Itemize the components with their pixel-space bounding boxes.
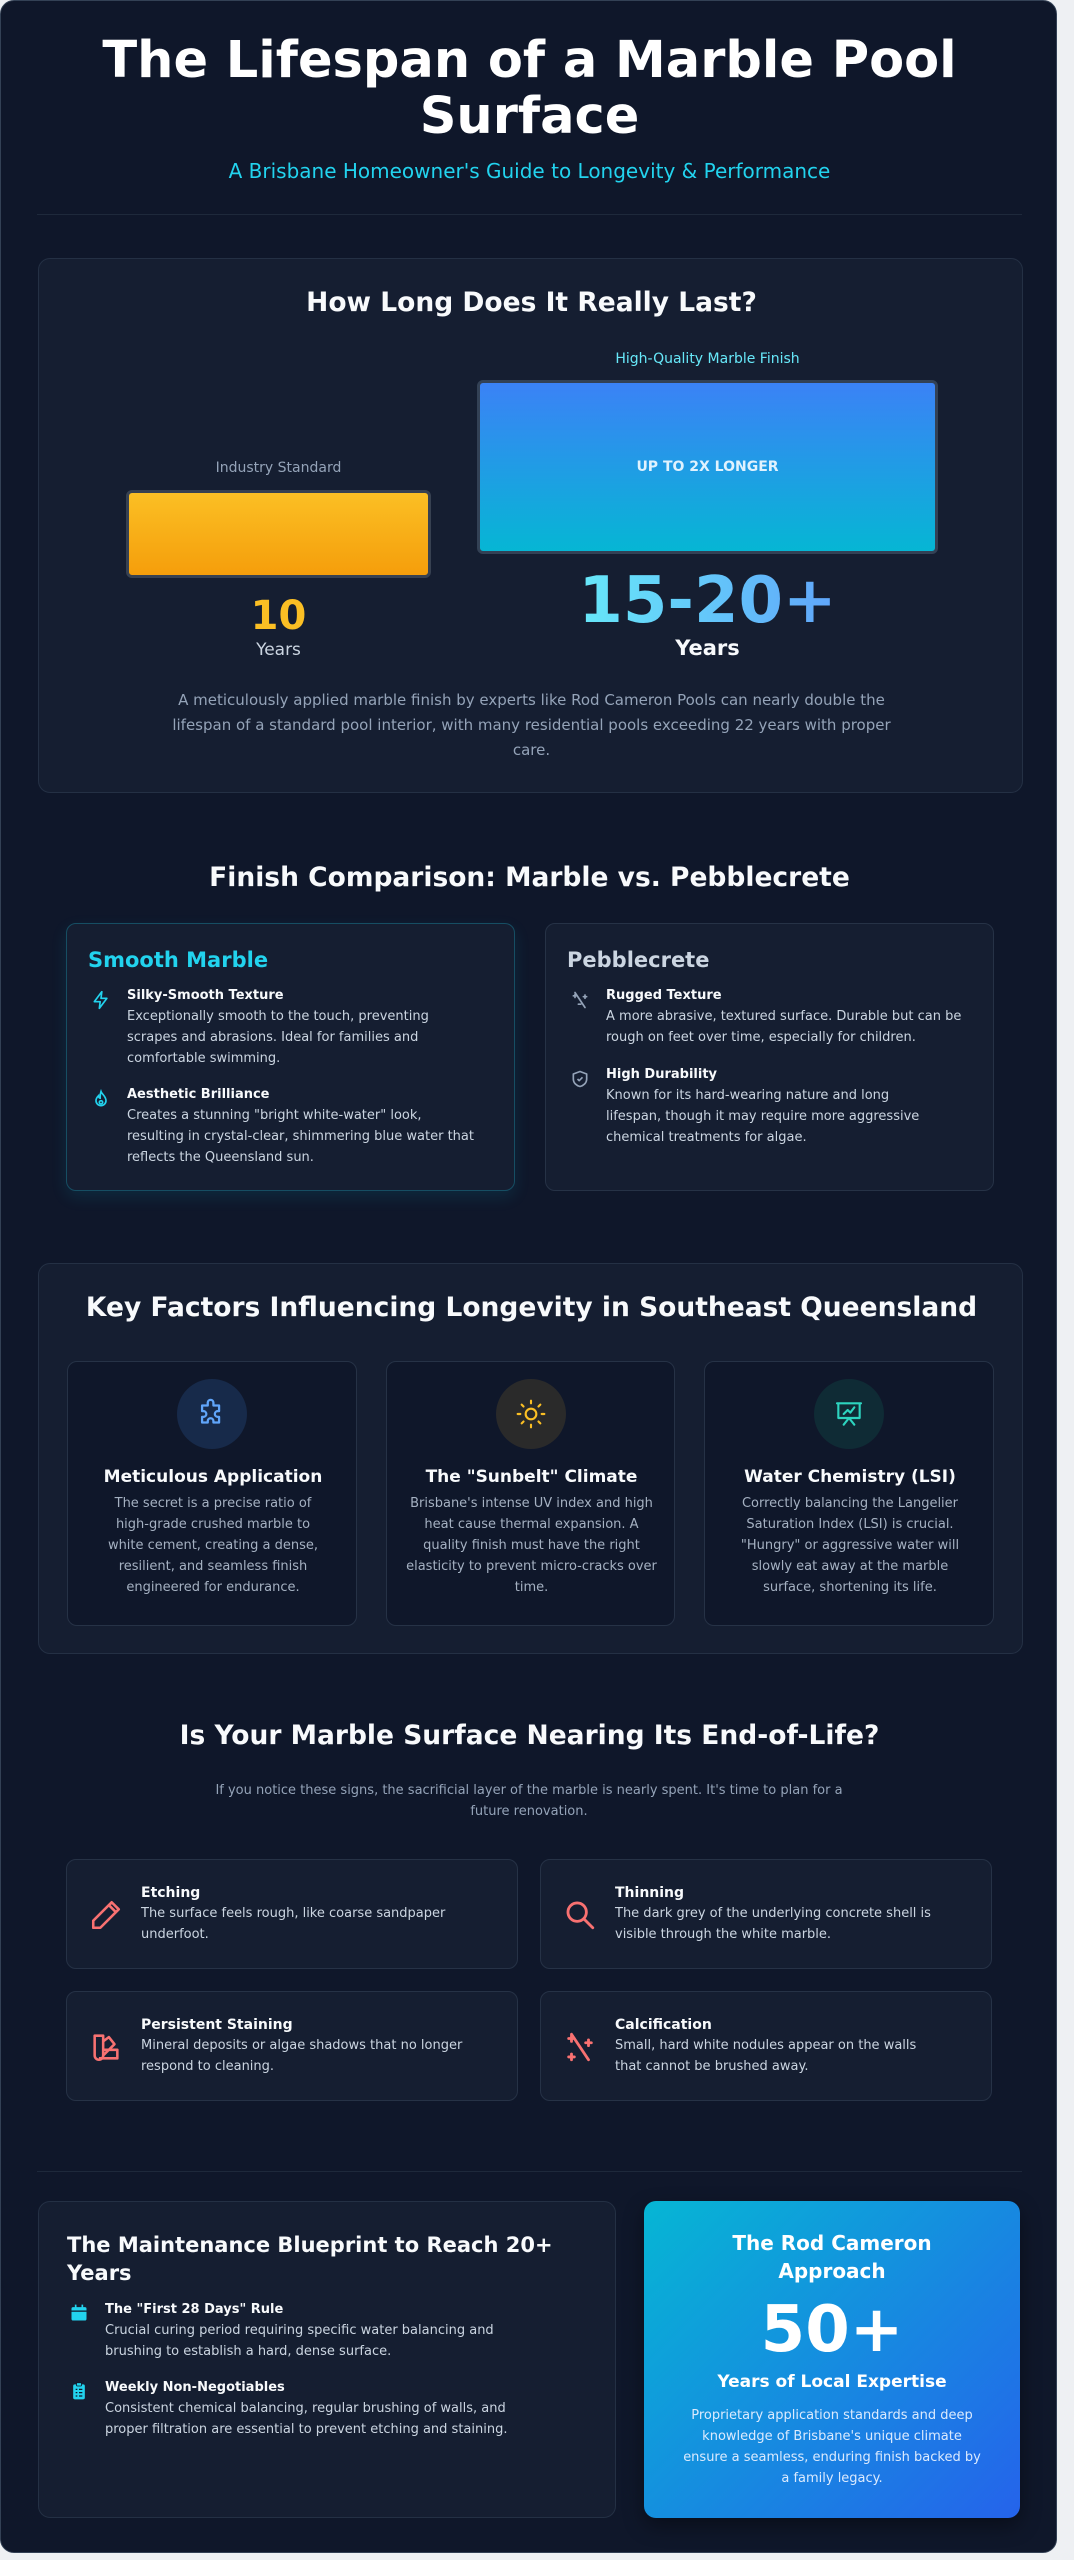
panel: lifespan comparison — [38, 258, 1023, 793]
factor: climate — [386, 1361, 675, 1626]
panel: maintenance blueprint — [38, 2201, 616, 2518]
subtitle: A Brisbane Homeowner's Guide to Longevity & Performance — [229, 159, 830, 183]
item: silky smooth — [94, 988, 429, 1066]
factor: water chemistry: Water Chemistry (LSI) — [744, 1467, 956, 1487]
panel: smooth marble: Creates a stunning "bright white-water" look, resulting in crystal-clear, shimmering blue water that reflects the Queensland sun. — [127, 1108, 474, 1165]
factor: climate: Brisbane's intense UV index and high heat cause thermal expansion. A quality finish must have the right elasticity to prevent micro-cracks over time. — [406, 1496, 657, 1595]
factor: water chemistry — [704, 1361, 994, 1626]
panel: smooth marble: Silky-Smooth Texture — [127, 988, 284, 1003]
sign: calcification: Small, hard white nodules appear on the walls that cannot be brushed away. — [615, 2038, 916, 2074]
panel: maintenance blueprint: Consistent chemical balancing, regular brushing of walls, and proper filtration are essential to prevent etching and staining. — [105, 2401, 507, 2437]
description: A meticulously applied marble finish by experts like Rod Cameron Pools can nearly double the lifespan of a standard pool interior, with many residential pools exceeding 22 years with proper care. — [172, 691, 891, 759]
title — [102, 31, 957, 146]
value: 10 years: 10 — [251, 593, 306, 639]
sign: staining: Persistent Staining — [141, 2017, 293, 2033]
sign: etching — [66, 1859, 518, 1969]
sign: thinning: The dark grey of the underlying concrete shell is visible through the white marble. — [615, 1906, 931, 1942]
heading: finish comparison: Finish Comparison: Marble vs. Pebblecrete — [209, 862, 850, 893]
sign: etching: The surface feels rough, like coarse sandpaper underfoot. — [141, 1906, 445, 1942]
factor: water chemistry: Correctly balancing the Langelier Saturation Index (LSI) is crucial. "Hungry" or aggressive water will slowly eat away at the marble surface, shortening its life. — [741, 1496, 959, 1595]
panel: pebblecrete — [545, 923, 994, 1191]
item: high durability — [572, 1067, 919, 1145]
intro text: If you notice these signs, the sacrificial layer of the marble is nearly spent. It's time to plan for a future renovation. — [215, 1783, 843, 1819]
factor: climate: The "Sunbelt" Climate — [426, 1467, 637, 1487]
sign: etching: Etching — [141, 1885, 200, 1901]
value: 15-20+ years: Years — [675, 636, 740, 660]
callout: rod cameron approach: Years of Local Expertise — [717, 2372, 947, 2392]
callout: rod cameron approach: Approach — [778, 2259, 886, 2283]
panel: pebblecrete: Pebblecrete — [567, 948, 709, 972]
panel: key factors — [38, 1263, 1023, 1654]
callout: rod cameron approach — [644, 2201, 1020, 2518]
sign: thinning — [540, 1859, 992, 1969]
item: aesthetic brilliance — [95, 1087, 474, 1165]
value: 15-20+ years: 15-20+ — [578, 564, 837, 638]
factor: application: The secret is a precise ratio of high-grade crushed marble to white cement, creating a dense, resilient, and seamless finish engineered for endurance. — [108, 1496, 318, 1595]
panel: smooth marble: Aesthetic Brilliance — [127, 1087, 270, 1102]
panel: smooth marble: Smooth Marble — [88, 948, 268, 972]
factor: application: Meticulous Application — [104, 1467, 322, 1487]
heading: How Long Does It Really Last? — [306, 287, 757, 318]
bar: industry standard — [126, 490, 431, 578]
item: first 28 days — [72, 2302, 494, 2359]
panel: smooth marble — [66, 923, 515, 1191]
value: 10 years: Years — [256, 640, 301, 660]
callout: rod cameron approach: The Rod Cameron — [732, 2231, 932, 2255]
panel: maintenance blueprint: The "First 28 Days" Rule — [105, 2302, 283, 2317]
factor: application — [67, 1361, 357, 1626]
item: weekly — [73, 2380, 507, 2437]
sign: calcification: Calcification — [615, 2017, 712, 2033]
item: rugged texture — [572, 988, 961, 1045]
heading: end of life: Is Your Marble Surface Nearing Its End-of-Life? — [180, 1720, 879, 1751]
panel: pebblecrete: Rugged Texture — [606, 988, 722, 1003]
label: marble: High-Quality Marble Finish — [615, 351, 800, 367]
title: Surface — [420, 87, 639, 146]
callout: rod cameron approach: 50+ — [761, 2293, 903, 2367]
sign: staining: Mineral deposits or algae shadows that no longer respond to cleaning. — [141, 2038, 462, 2074]
panel: maintenance blueprint: The Maintenance Blueprint to Reach 20+ Years — [67, 2233, 553, 2285]
sign: thinning: Thinning — [615, 1885, 684, 1901]
label: industry standard: Industry Standard — [216, 460, 341, 476]
panel: maintenance blueprint: Weekly Non-Negotiables — [105, 2380, 285, 2395]
sign: staining — [66, 1991, 518, 2101]
panel: pebblecrete: A more abrasive, textured surface. Durable but can be rough on feet over time, especially for children. — [606, 1009, 961, 1045]
title: The Lifespan of a Marble Pool — [102, 31, 957, 90]
value: 10 years — [251, 593, 306, 660]
heading: Key Factors Influencing Longevity in Southeast Queensland — [86, 1292, 977, 1323]
panel: maintenance blueprint: Crucial curing period requiring specific water balancing and brushing to establish a hard, dense surface. — [105, 2323, 494, 2359]
sign: calcification — [540, 1991, 992, 2101]
panel: pebblecrete: High Durability — [606, 1067, 717, 1082]
panel: pebblecrete: Known for its hard-wearing nature and long lifespan, though it may require more aggressive chemical treatments for algae. — [606, 1088, 919, 1145]
bar: marble: UP TO 2X LONGER — [636, 459, 779, 475]
bar: marble — [477, 380, 938, 554]
panel: smooth marble: Exceptionally smooth to the touch, preventing scrapes and abrasions. Ideal for families and comfortable swimming. — [127, 1009, 429, 1066]
callout: rod cameron approach: Proprietary application standards and deep knowledge of Brisbane's unique climate ensure a seamless, enduring finish backed by a family legacy. — [683, 2408, 981, 2486]
